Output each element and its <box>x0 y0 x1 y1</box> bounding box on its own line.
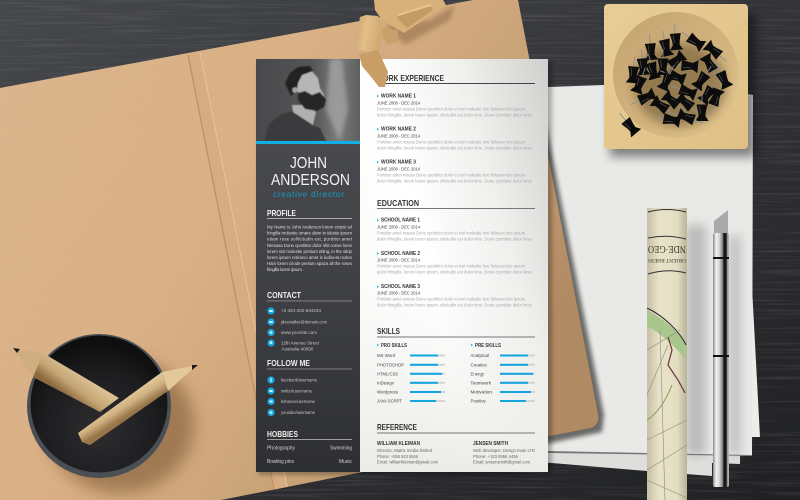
follow me section: behance/username <box>281 399 315 404</box>
education section: dolor tfringilla, lorem lorem ipsum, elicitudin est dolor time. Done cporttitor dolor lores <box>377 270 532 274</box>
name <box>271 155 350 189</box>
right white column <box>360 59 548 472</box>
work experience section: dolor tfringilla, lorem lorem ipsum, elicitudin est dolor time. Done cporttitor dolor lores <box>377 179 532 184</box>
contact section: +2 434-202-534234 <box>281 308 321 313</box>
follow me section: twitter/username <box>281 388 312 394</box>
education section: JUNE 2008 - DEC 2014 <box>377 258 421 262</box>
reference section: JENSEN SMITH <box>473 441 508 447</box>
inverted map title <box>648 243 686 262</box>
wooden push-pin block <box>604 4 748 149</box>
pre skills bars: Creative <box>470 362 487 367</box>
education section <box>377 198 535 308</box>
pro skills bars: PHOTOSHOP <box>377 362 404 367</box>
hobbies section: Photography <box>267 446 295 452</box>
bowl drop shadow <box>46 357 194 493</box>
work experience section: dolor tfringilla, lorem lorem ipsum, elicitudin est dolor time. Done cporttitor dolor lores <box>377 112 532 118</box>
pro skills bars: HTML/CSS <box>377 371 398 376</box>
work experience section: Porttitor amet massa Done cporttitor dolor et nisl molestie lore felisean lore ipsum <box>377 106 525 112</box>
profile section: fringilla molestie ornare diam in idestie ipsum <box>267 231 352 236</box>
work experience section: WORK NAME 2 <box>381 127 416 133</box>
pre skills bars: Analytical <box>470 353 489 358</box>
pre skills bars: Teamwork <box>470 380 492 385</box>
work experience section: Porttitor amet massa Done cporttitor dolor et nisl molestie lore felisean lore ipsum <box>377 173 525 178</box>
pre skills bars: Positive <box>470 399 486 404</box>
work experience section: JUNE 2008 - DEC 2014 <box>377 167 421 172</box>
hobbies section: Bowling pins <box>267 459 294 465</box>
education section: dolor tfringilla, lorem lorem ipsum, elicitudin est dolor time. Done cporttitor dolor lores <box>377 303 532 308</box>
pro skills bars: InDesign <box>377 380 394 385</box>
job title: creative director <box>273 190 344 199</box>
work experience section: JUNE 2008 - DEC 2014 <box>377 100 421 106</box>
contact section: jdoewalker@domain.com <box>280 320 327 324</box>
contact section: Australia 40000 <box>282 346 314 352</box>
hobbies section <box>267 429 352 465</box>
reference section: Web developer, Design mate LTD <box>473 448 535 453</box>
profile section: hitesasa Done cporttitor dolor shit conse lores <box>267 243 353 248</box>
reference section: Director, Matrix media limited <box>377 448 433 453</box>
hobbies section: HOBBIES <box>267 429 298 439</box>
reference section: WILLIAM KLEIMAN <box>377 441 420 447</box>
contact section: CONTACT <box>267 290 302 300</box>
education section: EDUCATION <box>377 198 419 208</box>
work experience section: WORK EXPERIENCE <box>377 73 444 83</box>
reference section: Email: jensensmith@gmail.com <box>473 460 530 465</box>
follow me section: FOLLOW ME <box>267 358 310 368</box>
pre skills bars: Motivation <box>470 390 492 395</box>
kraft paper folder <box>0 0 620 500</box>
profile section: PROFILE <box>267 208 296 218</box>
follow me section <box>267 358 352 416</box>
pencil: right <box>78 365 198 445</box>
skills section: SKILLS <box>377 326 400 336</box>
education section: JUNE 2008 - DEC 2014 <box>377 291 421 296</box>
push pins <box>614 23 733 137</box>
reference section: Phone: +555 523 5566 <box>377 454 419 459</box>
skills section: PRO SKILLS <box>381 343 408 349</box>
blue accent bar <box>256 141 360 144</box>
roll and knife shadows <box>686 225 741 455</box>
profile section: lorem ipsum retiranci amet is ludinest.moles <box>267 255 353 260</box>
pre skills bars <box>470 353 535 404</box>
education section: SCHOOL NAME 2 <box>381 251 420 257</box>
pro skills bars: MS Word <box>377 353 395 358</box>
pro skills bars <box>377 353 445 404</box>
hobbies section: Music <box>339 459 352 465</box>
profile section: fringilla lorem ipsum . <box>267 267 304 272</box>
education section: SCHOOL NAME 1 <box>381 218 420 224</box>
rolled map <box>647 208 687 500</box>
work experience section: Porttitor amet massa Done cporttitor dolor et nisl molestie lore felisean lore ipsum <box>377 140 525 145</box>
pro skills bars: Wordpress <box>377 390 399 395</box>
hobbies section: Swimming <box>330 446 352 452</box>
pencil: left <box>13 348 119 412</box>
profile section: lorem sist molestie pretium etling, in the sitrip <box>267 249 353 254</box>
education section: Porttitor amet massa Done cporttitor dolor et nisl molestie lore felisean lore ipsum <box>377 230 525 236</box>
education section: JUNE 2008 - DEC 2014 <box>377 224 421 230</box>
work experience section: WORK NAME 3 <box>381 160 416 166</box>
black pencil bowl <box>13 334 198 478</box>
portrait photo <box>256 59 360 141</box>
work experience section: JUNE 2008 - DEC 2014 <box>377 134 421 139</box>
reference section <box>377 422 535 465</box>
name: JOHN <box>290 155 327 172</box>
follow me section: youtube/username <box>281 410 315 415</box>
pro skills bars: JAVA SCRPT <box>377 399 402 404</box>
skills section <box>377 326 535 404</box>
pre skills bars: Energy <box>470 371 485 376</box>
skills section: PRE SKILLS <box>475 343 502 349</box>
contact section <box>267 290 352 352</box>
fold band on folder <box>188 53 290 500</box>
work experience section: WORK NAME 1 <box>381 94 416 100</box>
resume sheet <box>256 59 548 472</box>
contact section: 12th Avenue Street <box>281 340 320 346</box>
profile section: My Name is John Anderson lorem enipsi sd <box>267 224 353 230</box>
work experience section: dolor tfringilla, lorem lorem ipsum, elicitudin est dolor time. Done cporttitor dolor lores <box>377 146 532 151</box>
education section: SCHOOL NAME 3 <box>381 284 420 290</box>
name: ANDERSON <box>271 172 350 189</box>
craft knife <box>713 210 729 487</box>
follow me section: facebook/username <box>281 378 317 382</box>
profile section: etiam rose sollicitudin est, porttitor amet <box>267 237 353 242</box>
inverted map title: ORIENT RHEIN <box>648 257 686 262</box>
left dark sidebar <box>256 59 360 472</box>
reference section: Phone: +123 5556 4455 <box>473 454 519 459</box>
contact section: www.yoursite.com <box>281 330 317 335</box>
pin block shadow <box>610 14 755 157</box>
education section: dolor tfringilla, lorem lorem ipsum, elicitudin est dolor time. Done cporttitor dolor lores <box>377 236 532 242</box>
profile section <box>267 208 353 272</box>
education section: Porttitor amet massa Done cporttitor dolor et nisl molestie lore felisean lore ipsum <box>377 297 525 302</box>
inverted map title: NDE·GEO <box>648 243 686 255</box>
resume drop shadow <box>258 62 552 475</box>
profile section: Ham lorem cirode pretium spaza all the roses <box>267 261 353 266</box>
reference section: REFERENCE <box>377 422 417 432</box>
white paper sheets stack <box>540 85 760 476</box>
wooden mannequin hand <box>355 0 455 87</box>
education section: Porttitor amet massa Done cporttitor dolor et nisl molestie lore felisean lore ipsum <box>377 264 525 268</box>
reference section: Email: williamkleiman@gmail.com <box>377 460 438 465</box>
work experience section <box>377 73 535 184</box>
